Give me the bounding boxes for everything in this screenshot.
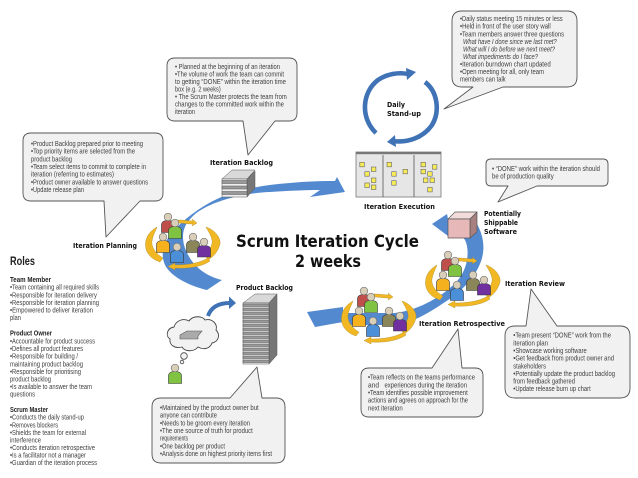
- arrow: review to backlog: [307, 214, 483, 327]
- callout: daily stand-up: members can talk: [460, 77, 506, 84]
- callout: iteration review: stakeholders: [513, 363, 546, 370]
- callout: iteration review: •Showcase working software: [513, 348, 587, 355]
- icon: stakeholder person: [168, 364, 182, 384]
- icon: task board: [356, 152, 441, 197]
- panel: roles: •Defines all product features: [10, 346, 83, 353]
- callout: iteration review: •Update release burn up chart: [513, 386, 591, 393]
- callout: iteration backlog: box (e.g. 2 weeks): [175, 86, 221, 94]
- callout: daily stand-up: What impediments do I face?: [463, 54, 538, 61]
- callout: daily stand-up: [444, 11, 577, 109]
- callout: product backlog: •Analysis done on highest priority items first: [160, 451, 272, 458]
- callout: iteration backlog: • The Scrum Master protects the team from: [175, 94, 287, 101]
- team: iteration review: [425, 251, 500, 308]
- callout: iteration review: iteration plan: [513, 340, 548, 347]
- callout: product backlog: •Maintained by the product owner but: [160, 405, 259, 412]
- panel: roles: •Removes blockers: [10, 422, 58, 429]
- callout: daily stand-up: What will I do before we next meet?: [463, 46, 555, 54]
- callout: daily stand-up: •Daily status meeting 15 minutes or less: [460, 16, 563, 23]
- arrow: idea to product backlog: [208, 296, 236, 316]
- callout: iteration review: •Get feedback from product owner and: [513, 356, 614, 363]
- panel: roles: maintaining product backlog: [10, 361, 83, 368]
- callout: iteration retrospective: •Team reflects on the teams performance: [368, 375, 475, 382]
- panel: roles: •Guardian of the iteration process: [10, 460, 97, 467]
- callout: done work: • “DONE” work within the iteration should: [492, 166, 600, 173]
- callout: iteration review: from feedback gathered: [513, 379, 575, 386]
- title: 2 weeks: [295, 252, 361, 272]
- label: daily stand-up: Stand-up: [387, 109, 421, 118]
- callout: daily stand-up: •Team members answer three questions: [460, 31, 564, 38]
- panel: roles: •Accountable for product success: [10, 338, 95, 345]
- callout: iteration planning: product backlog: [31, 156, 72, 163]
- callout: iteration planning: •Update release plan: [31, 187, 84, 194]
- panel: roles: [10, 254, 99, 467]
- callout: iteration planning: •Top priority items are selected from the: [31, 149, 135, 156]
- panel: roles: •Conducts the daily stand-up: [10, 415, 84, 422]
- callout: iteration retrospective: and: [368, 382, 379, 389]
- callout: product backlog: •Needs to be groom every iteration: [160, 420, 250, 427]
- callout: iteration retrospective: •Team identifies possible improvement: [368, 390, 468, 397]
- callout: product backlog: [152, 367, 285, 463]
- title: Scrum Iteration Cycle: [236, 232, 419, 252]
- panel: roles: Team Member: [10, 277, 51, 284]
- callout: product backlog: anyone can contribute: [160, 413, 217, 420]
- panel: roles: •Team containing all required skills: [10, 285, 99, 292]
- label: potentially shippable software: Potentially: [484, 209, 521, 218]
- panel: roles: Product Owner: [10, 331, 52, 338]
- callout: iteration planning: iteration (referring to estimates): [31, 172, 114, 179]
- callout: iteration retrospective: next iteration: [368, 405, 403, 412]
- callout: daily stand-up: •Open meeting for all, only team: [460, 69, 544, 76]
- icon: daily stand-up cycle arrows: [365, 68, 437, 147]
- label: potentially shippable software: Software: [484, 227, 517, 236]
- icon: idea cloud: [167, 317, 219, 364]
- label: iteration planning: Iteration Planning: [73, 241, 137, 250]
- arrow: planning to execution: [163, 177, 345, 290]
- callout: iteration backlog: changes to the committed work within the: [175, 102, 284, 109]
- callout: iteration review: [505, 289, 630, 398]
- panel: roles: questions: [10, 392, 35, 399]
- callout: product backlog: •One backlog per product: [160, 443, 225, 450]
- label: potentially shippable software: Shippable: [484, 218, 518, 227]
- label: iteration execution: Iteration Execution: [364, 202, 435, 211]
- panel: roles: •Is available to answer the team: [10, 384, 92, 391]
- callout: iteration backlog: iteration: [175, 109, 195, 116]
- callout: done work: be of production quality: [492, 174, 554, 181]
- callout: daily stand-up: •Held in front of the user story wall: [460, 24, 551, 31]
- callout: iteration review: •Potentially update the product backlog: [513, 371, 615, 378]
- panel: roles: •Shields the team for external: [10, 430, 86, 437]
- callout: done work: [486, 159, 608, 202]
- callout: iteration retrospective: actions and agrees on approach for the: [368, 398, 468, 405]
- label: iteration backlog: Iteration Backlog: [210, 158, 273, 167]
- panel: roles: interference: [10, 437, 41, 444]
- callout: product backlog: requirements: [160, 436, 188, 443]
- label: potentially shippable software: [484, 209, 521, 236]
- callout: iteration planning: •Team select items to commit to complete in: [31, 164, 146, 171]
- panel: roles: •Responsible for iteration planning: [10, 300, 99, 307]
- team: iteration retrospective: [341, 287, 416, 344]
- callout: iteration planning: •Product owner available to answer questions: [31, 179, 148, 186]
- callout: iteration backlog: to getting “DONE” within the iteration time: [175, 79, 286, 86]
- callout: iteration backlog: • Planned at the beginning of an iteration: [175, 64, 280, 71]
- callout: daily stand-up: •Iteration burndown chart updated: [460, 62, 551, 68]
- label: daily stand-up: [387, 100, 421, 118]
- title: [236, 232, 419, 272]
- icon: shippable software box: [448, 212, 477, 238]
- panel: roles: •Responsible for building /: [10, 354, 78, 360]
- label: product backlog: Product Backlog: [236, 283, 293, 292]
- callout: iteration backlog: [167, 58, 297, 155]
- panel: roles: •Responsible for prioritising: [10, 369, 81, 376]
- callout: iteration review: •Team present “DONE” work from the: [513, 333, 611, 340]
- panel: roles: Scrum Master: [10, 407, 48, 414]
- team: iteration planning: [145, 213, 220, 270]
- label: iteration retrospective: Iteration Retrospective: [419, 319, 505, 328]
- panel: roles: •Responsible for iteration delivery: [10, 292, 97, 299]
- panel: roles: •Conducts iteration retrospective: [10, 445, 95, 452]
- icon: product backlog stack: [243, 294, 277, 364]
- panel: roles: plan: [10, 315, 21, 322]
- label: iteration review: Iteration Review: [505, 279, 565, 288]
- callout: iteration retrospective: [361, 329, 483, 417]
- callout: iteration planning: [23, 133, 163, 237]
- label: daily stand-up: Daily: [387, 100, 405, 109]
- callout: daily stand-up: What have I done since we last met?: [463, 39, 557, 46]
- panel: roles: •Empowered to deliver iteration: [10, 308, 93, 314]
- panel: roles: •Is a facilitator not a manager: [10, 453, 87, 460]
- callout: iteration retrospective: experiences during the iteration: [384, 382, 467, 389]
- callout: iteration backlog: •The volume of work the team can commit: [175, 72, 284, 79]
- panel: roles: product backlog: [10, 376, 51, 383]
- icon: iteration backlog stack: [222, 170, 255, 197]
- callout: product backlog: •The one source of truth for product: [160, 428, 253, 435]
- callout: iteration planning: •Product Backlog prepared prior to meeting: [31, 141, 143, 148]
- panel: roles: Roles: [10, 254, 35, 268]
